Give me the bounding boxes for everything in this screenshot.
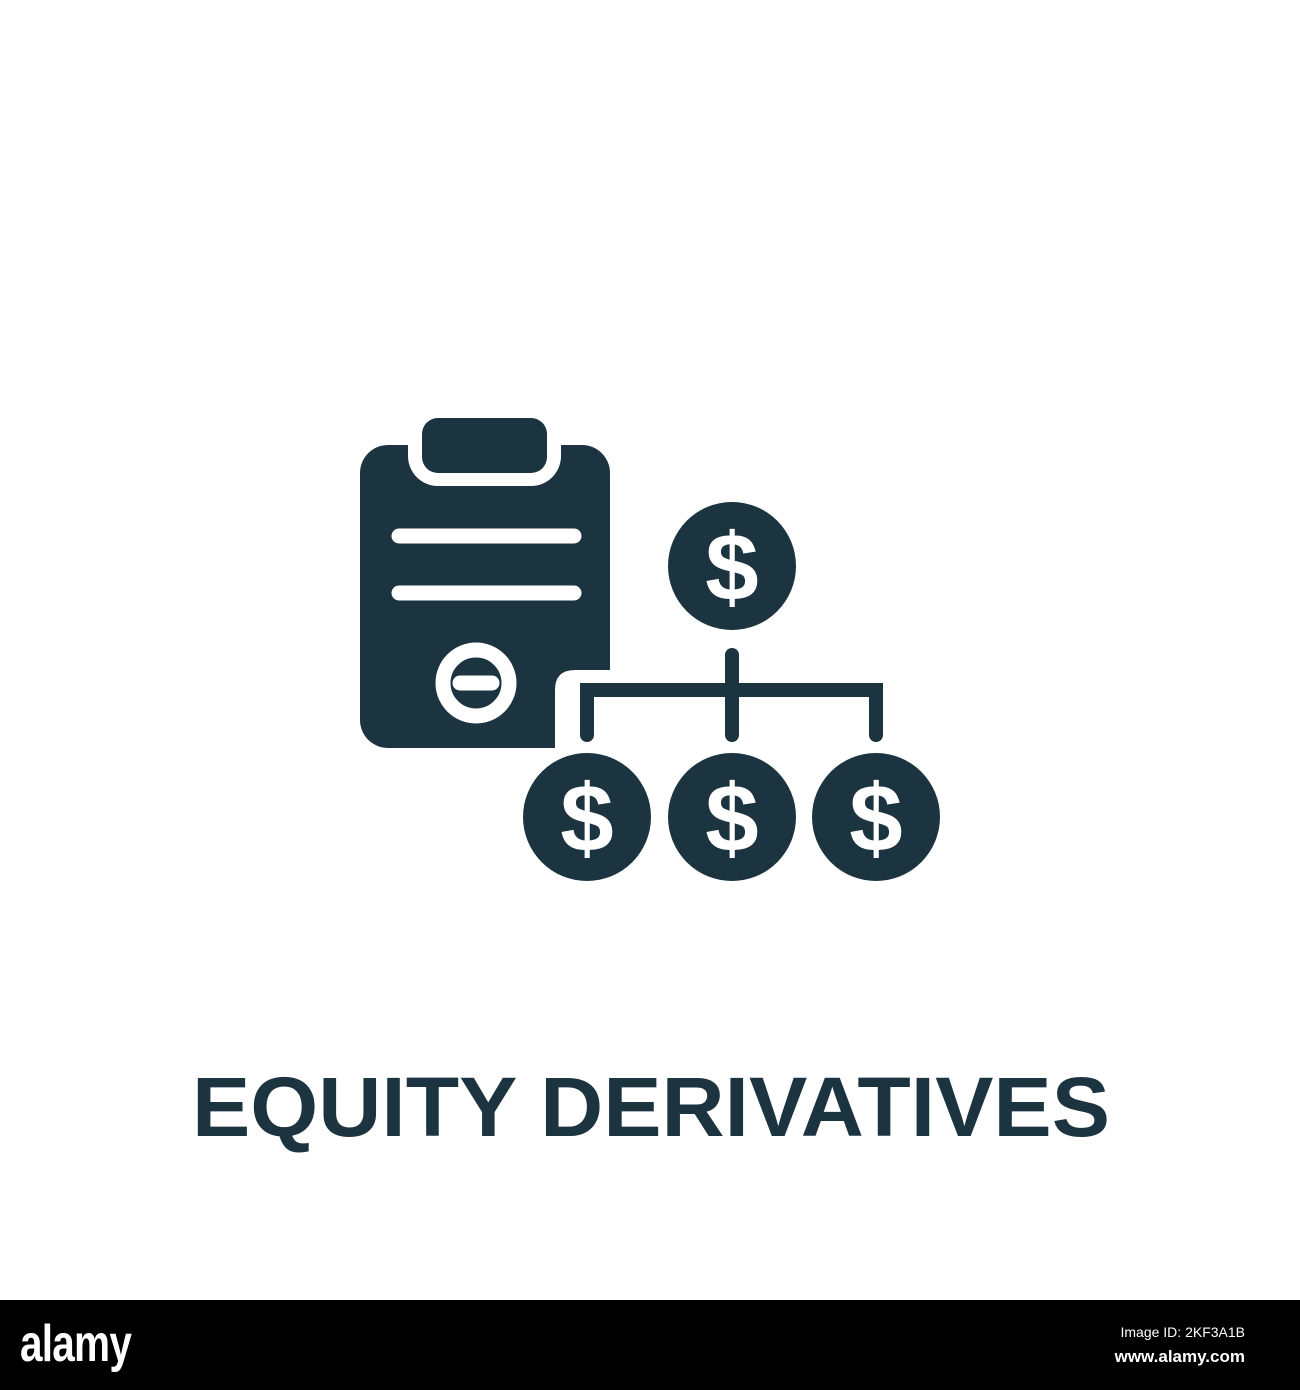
clipboard	[360, 404, 620, 760]
title: EQUITY DERIVATIVES	[192, 1060, 1110, 1154]
coins: $	[560, 765, 614, 872]
coins: $	[705, 765, 759, 872]
website: www.alamy.com	[1115, 1347, 1245, 1366]
coins: $	[849, 765, 903, 872]
footer bar	[0, 1300, 1300, 1390]
coins: $	[705, 514, 759, 621]
coins	[523, 502, 940, 881]
org chart connector	[587, 655, 876, 735]
logo: alamy: alamy	[20, 1315, 131, 1373]
image id: Image ID: 2KF3A1B	[1120, 1324, 1245, 1340]
